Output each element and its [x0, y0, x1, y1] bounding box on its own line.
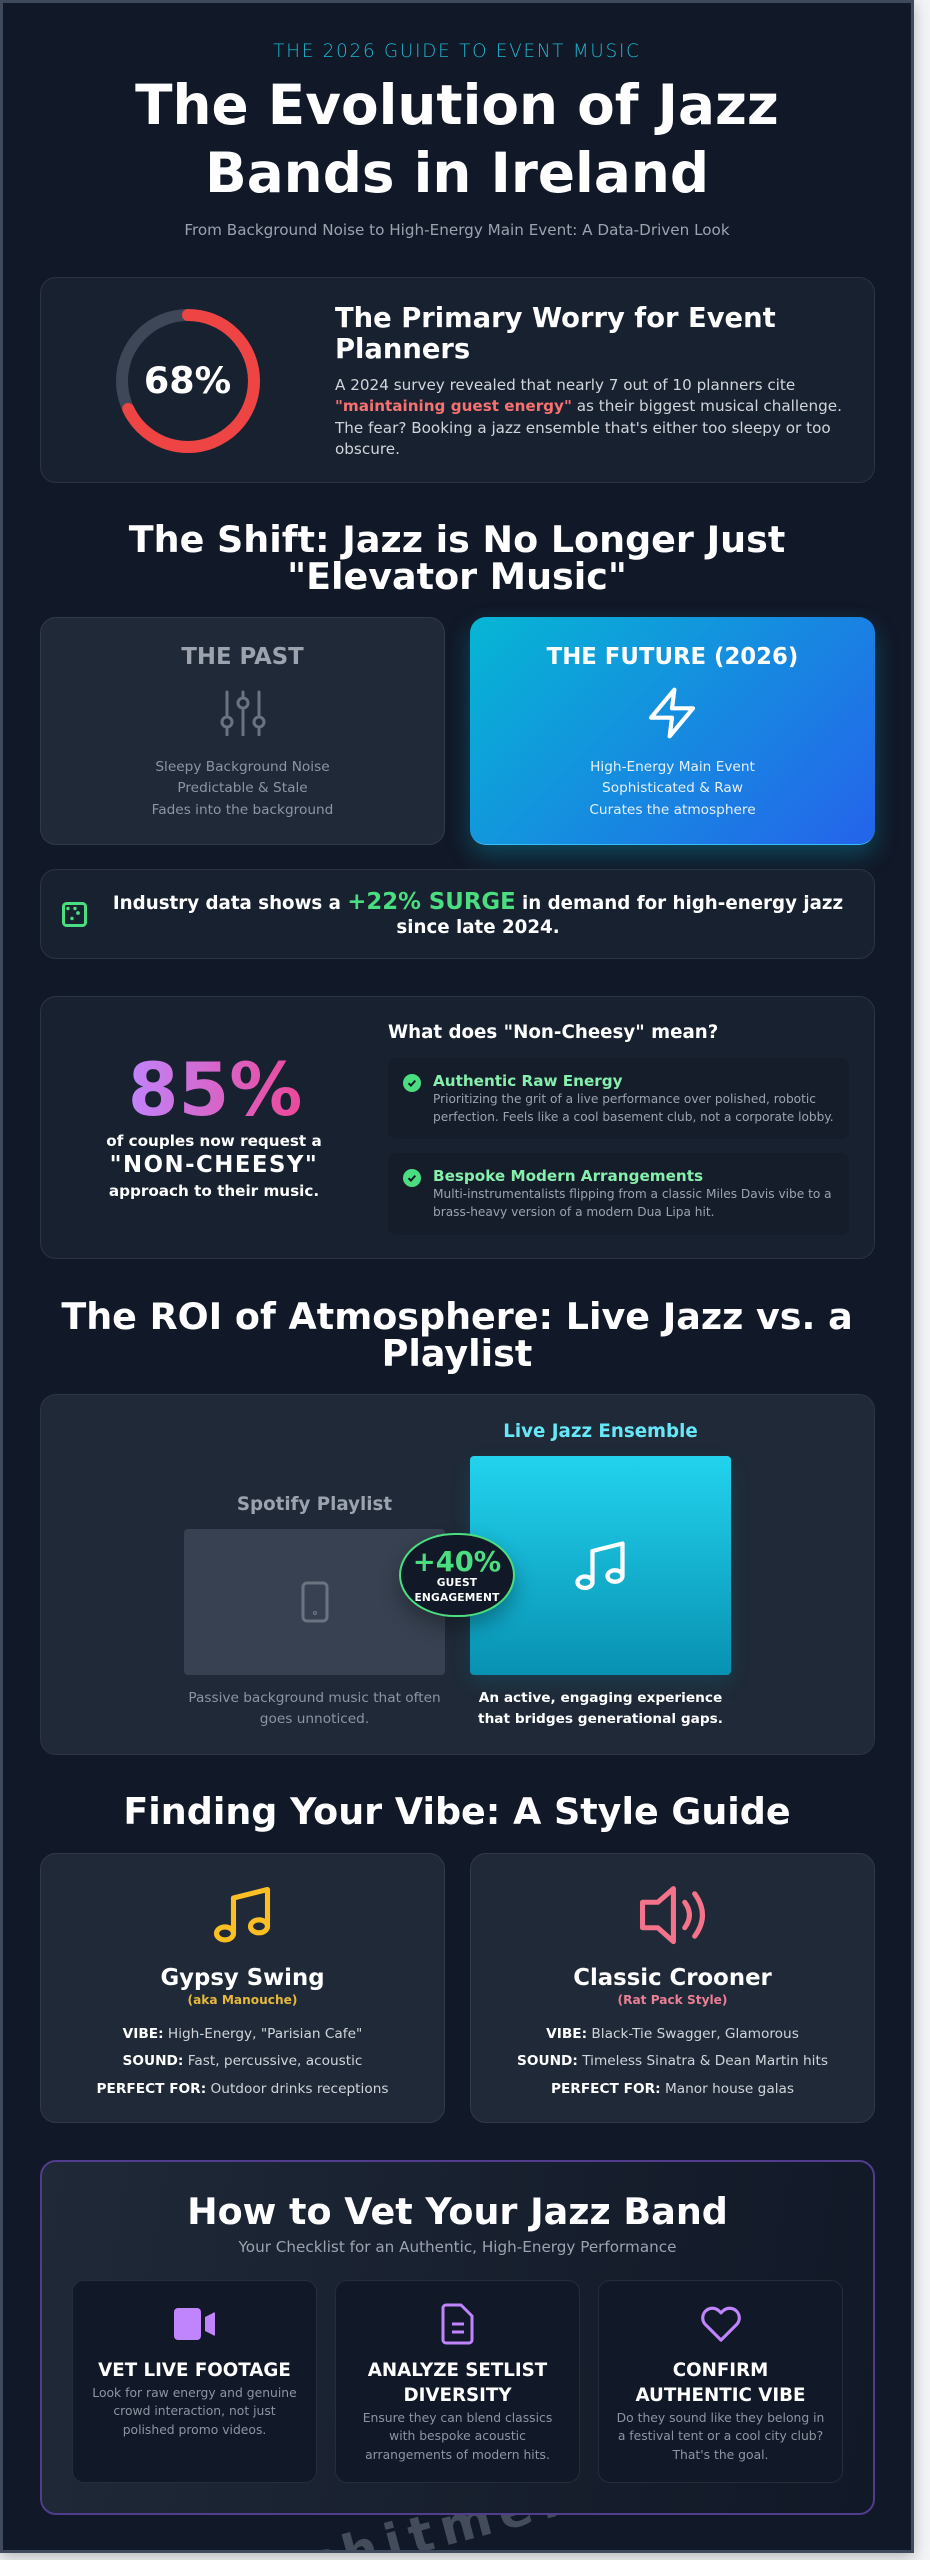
- step title: [636, 2360, 805, 2406]
- step text: That's the goal.: [672, 2448, 768, 2462]
- step: vibe: [598, 2280, 843, 2483]
- body text: [334, 376, 842, 458]
- future title: THE FUTURE (2026): [547, 644, 798, 670]
- step title: ANALYZE SETLIST: [368, 2360, 547, 2381]
- icon: file: [442, 2304, 474, 2344]
- icon: trend: [62, 902, 87, 927]
- step: live footage: [72, 2280, 317, 2483]
- subheading: Your Checklist for an Authentic, High-Energy Performance: [239, 2238, 676, 2256]
- future list: Curates the atmosphere: [589, 802, 756, 818]
- bar: live jazz: [470, 1456, 731, 1675]
- panel: how to vet: [40, 2160, 875, 2515]
- step text: Do they sound like they belong in: [617, 2411, 824, 2425]
- badge: +40%: +40%: [413, 1547, 501, 1578]
- past list: [152, 759, 333, 818]
- step title: CONFIRM: [673, 2360, 768, 2381]
- step text: [363, 2411, 552, 2462]
- heading: The Primary Worry for Event: [335, 303, 776, 334]
- details: PERFECT FOR: Manor house galas: [551, 2081, 794, 2097]
- icon: heart: [701, 2306, 741, 2342]
- panel: primary worry: [40, 277, 875, 483]
- item: bespoke arrangements: [388, 1153, 849, 1235]
- caption: live: that bridges generational gaps.: [478, 1711, 723, 1727]
- step text: a festival tent or a cool city club?: [618, 2429, 823, 2443]
- future list: High-Energy Main Event: [590, 759, 755, 775]
- heading: the shift: "Elevator Music": [287, 555, 627, 598]
- icon: music note: [214, 1887, 270, 1942]
- body text: The fear? Booking a jazz ensemble that's either too sleepy or too: [335, 419, 831, 437]
- details: [97, 2026, 388, 2097]
- icon: check: [403, 1074, 421, 1092]
- body text: A 2024 survey revealed that nearly 7 out of 10 planners cite: [335, 376, 795, 394]
- title: The Evolution of Jazz: [135, 73, 779, 137]
- step title: VET LIVE FOOTAGE: [98, 2360, 291, 2381]
- badge: +40%: GUEST: [437, 1576, 477, 1589]
- item: authentic raw energy: [388, 1058, 849, 1139]
- heading: roi: [61, 1295, 853, 1375]
- icon: video: [174, 2308, 216, 2340]
- step text: [92, 2386, 297, 2437]
- details: VIBE: High-Energy, "Parisian Cafe": [123, 2026, 362, 2042]
- name: Classic Crooner: [573, 1965, 772, 1991]
- caption: live: An active, engaging experience: [479, 1690, 722, 1706]
- label: spotify playlist: Spotify Playlist: [237, 1494, 392, 1515]
- caption: playlist: [188, 1690, 441, 1727]
- heading: the shift: The Shift: Jazz is No Longer Just: [129, 518, 785, 561]
- step text: Ensure they can blend classics: [363, 2411, 552, 2425]
- subtitle: From Background Noise to High-Energy Main Event: A Data-Driven Look: [184, 221, 730, 239]
- step text: crowd interaction, not just: [113, 2404, 276, 2418]
- heading: style guide: Finding Your Vibe: A Style Guide: [123, 1790, 791, 1833]
- past list: Predictable & Stale: [177, 780, 308, 796]
- step text: polished promo videos.: [123, 2423, 266, 2437]
- icon: sliders: [220, 690, 266, 736]
- step text: with bespoke acoustic: [389, 2429, 526, 2443]
- details: [517, 2026, 828, 2097]
- icon: lightning: [648, 688, 696, 738]
- title: [135, 73, 779, 205]
- item: authentic raw energy: Prioritizing the grit of a live performance over polished, robotic: [433, 1092, 816, 1106]
- step title: DIVERSITY: [403, 2384, 512, 2406]
- heading: roi: The ROI of Atmosphere: Live Jazz vs. a: [61, 1295, 853, 1338]
- item: bespoke arrangements: Multi-instrumentalists flipping from a classic Miles Davis vibe to a: [433, 1187, 832, 1201]
- details: PERFECT FOR: Outdoor drinks receptions: [97, 2081, 388, 2097]
- right heading: What does "Non-Cheesy" mean?: [388, 1022, 718, 1043]
- past list: Fades into the background: [152, 802, 333, 818]
- step title: [368, 2360, 548, 2406]
- icon: music note: [575, 1541, 625, 1590]
- icon: speaker: [640, 1886, 706, 1944]
- future list: [589, 759, 756, 818]
- details: SOUND: Fast, percussive, acoustic: [123, 2053, 362, 2069]
- stat caption: of couples now request a: [106, 1132, 322, 1150]
- badge: +40%: [399, 1533, 515, 1617]
- icon: phone: [302, 1582, 328, 1622]
- panel: classic crooner: [470, 1853, 875, 2123]
- step text: Look for raw energy and genuine: [92, 2386, 297, 2400]
- stat caption: "NON-CHEESY": [110, 1152, 318, 1178]
- panel: non-cheesy: [40, 996, 875, 1259]
- heading: roi: Playlist: [382, 1332, 532, 1375]
- panel: the past: [40, 617, 445, 845]
- subtitle: (Rat Pack Style): [618, 1993, 727, 2007]
- kicker: THE 2026 GUIDE TO EVENT MUSIC: [273, 41, 641, 62]
- name: Gypsy Swing: [160, 1965, 325, 1991]
- title: Bands in Ireland: [205, 141, 709, 205]
- donut chart 68%: [116, 309, 260, 453]
- label: live jazz: Live Jazz Ensemble: [503, 1421, 698, 1442]
- body text: obscure.: [335, 440, 400, 458]
- donut chart 68%: 68%: [144, 359, 231, 402]
- caption: live: [478, 1690, 723, 1727]
- surge text: since late 2024.: [396, 917, 560, 938]
- past list: Sleepy Background Noise: [155, 759, 330, 775]
- body text: "maintaining guest energy" as their biggest musical challenge.: [335, 397, 842, 415]
- bar: spotify playlist: [184, 1529, 445, 1675]
- step text: [617, 2411, 824, 2462]
- item: bespoke arrangements: brass-heavy version of a modern Dua Lipa hit.: [433, 1205, 714, 1219]
- badge: +40%: ENGAGEMENT: [414, 1590, 500, 1604]
- stat caption: [106, 1132, 322, 1200]
- heading: Planners: [335, 334, 470, 365]
- details: SOUND: Timeless Sinatra & Dean Martin hits: [517, 2053, 828, 2069]
- item: authentic raw energy: perfection. Feels like a cool basement club, not a corporate lobby.: [433, 1110, 834, 1124]
- step title: AUTHENTIC VIBE: [636, 2384, 805, 2406]
- past title: THE PAST: [181, 644, 304, 670]
- subtitle: (aka Manouche): [188, 1993, 297, 2007]
- heading: [335, 303, 776, 365]
- panel: surge callout: [40, 869, 875, 959]
- step: setlist: [335, 2280, 580, 2483]
- item text: Bespoke Modern Arrangements: [433, 1167, 703, 1185]
- stat caption: approach to their music.: [109, 1182, 319, 1200]
- caption: playlist: goes unnoticed.: [260, 1711, 369, 1727]
- panel: the future: [470, 617, 875, 845]
- heading: How to Vet Your Jazz Band: [187, 2190, 728, 2233]
- caption: playlist: Passive background music that often: [188, 1690, 441, 1706]
- icon: check: [403, 1169, 421, 1187]
- details: VIBE: Black-Tie Swagger, Glamorous: [546, 2026, 799, 2042]
- panel: gypsy swing: [40, 1853, 445, 2123]
- step text: arrangements of modern hits.: [365, 2448, 550, 2462]
- panel: roi comparison: [40, 1394, 875, 1755]
- heading: the shift: [128, 518, 785, 598]
- stat 85%: 85%: [128, 1048, 302, 1133]
- item text: Authentic Raw Energy: [433, 1072, 623, 1090]
- surge text: Industry data shows a +22% SURGE in demand for high-energy jazz: [113, 889, 843, 915]
- future list: Sophisticated & Raw: [602, 780, 743, 796]
- surge text: [113, 889, 843, 938]
